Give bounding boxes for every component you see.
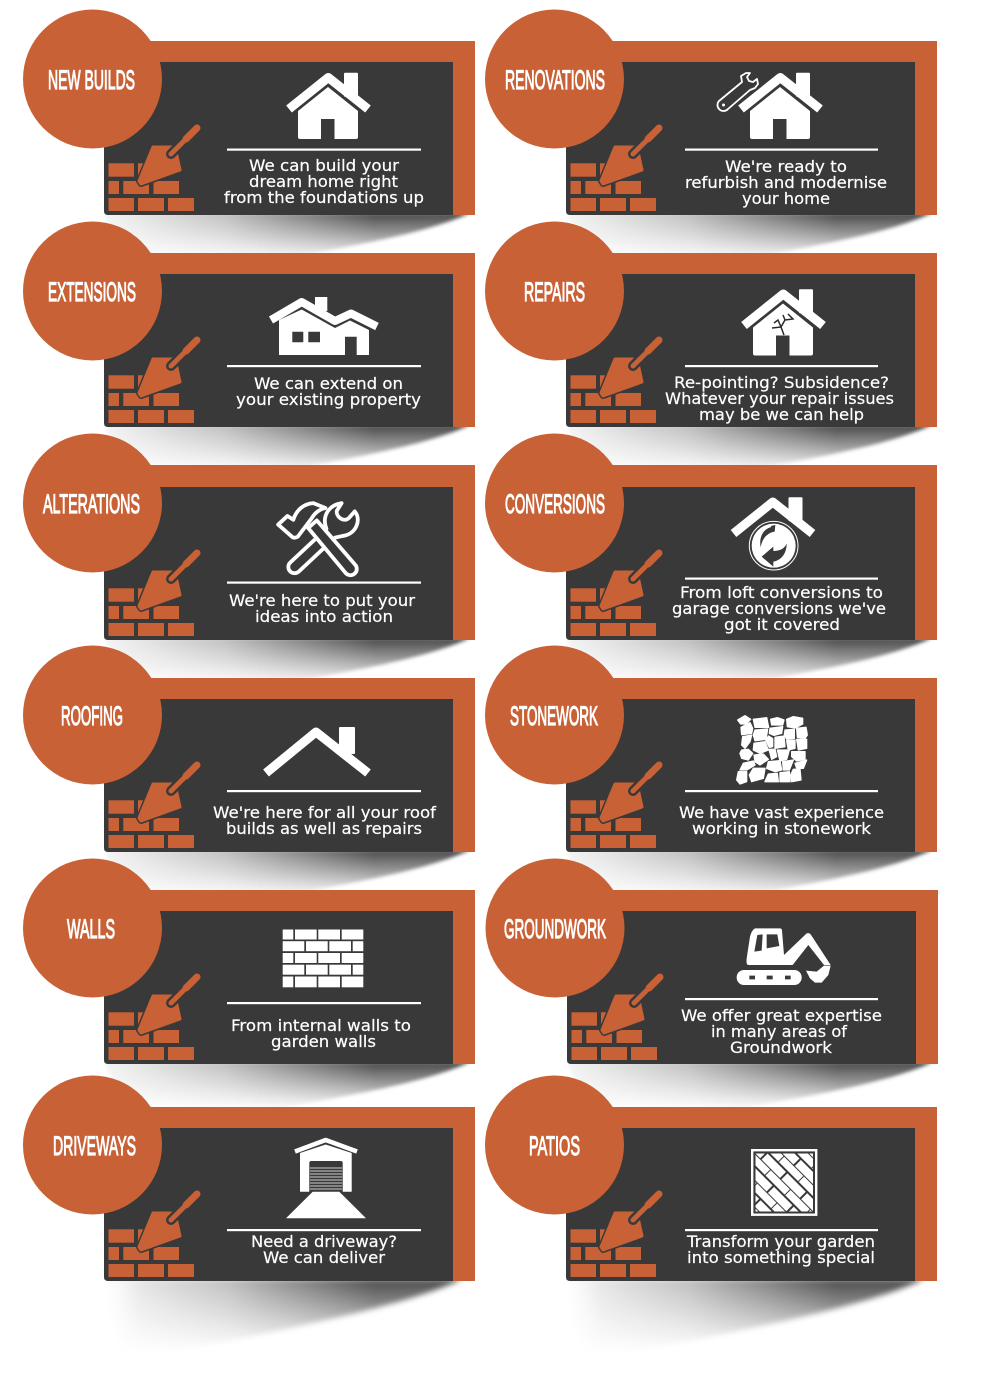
panel: roofing: ROOFING: [61, 701, 123, 731]
heading: walls: WALLS: [67, 914, 115, 944]
icon: trowel and bricks: [570, 553, 659, 636]
text: walls description: From internal walls to: [231, 1016, 411, 1035]
text: driveways description: [251, 1232, 397, 1267]
icon: garage with driveway: [286, 1140, 366, 1218]
icon: house: [289, 73, 368, 139]
panel: new builds: [23, 10, 475, 264]
icon: hammer and wrench: [278, 503, 358, 575]
text: repairs description: may be we can help: [699, 405, 864, 424]
panel: stonework: [485, 646, 937, 901]
panel: walls: [23, 858, 475, 1113]
heading: repairs: REPAIRS: [524, 277, 585, 307]
text: roofing description: builds as well as repairs: [226, 819, 422, 838]
text: roofing description: We're here for all your roof: [213, 803, 436, 822]
text: groundwork description: in many areas of: [711, 1022, 847, 1041]
text: renovations description: refurbish and modernise: [685, 173, 887, 192]
text: extensions description: We can extend on: [254, 374, 403, 393]
text: driveways description: Need a driveway?: [251, 1232, 397, 1251]
panel: repairs: [485, 222, 937, 476]
panel: extensions: [23, 222, 475, 476]
icon: trowel and bricks: [108, 553, 197, 636]
icon: excavator: [737, 928, 831, 985]
icon: trowel and bricks: [108, 340, 197, 423]
text: stonework description: [679, 803, 884, 838]
icon: cracked house: [744, 289, 823, 356]
text: alterations description: [229, 591, 415, 626]
text: extensions description: [236, 374, 421, 409]
icon: trowel and bricks: [570, 1194, 659, 1277]
heading: alterations: ALTERATIONS: [43, 489, 140, 519]
text: roofing description: [213, 803, 436, 838]
text: alterations description: We're here to put your: [229, 591, 415, 610]
text: repairs description: [665, 373, 894, 424]
text: renovations description: your home: [742, 189, 830, 208]
text: conversions description: [672, 583, 886, 634]
icon: stone pattern: [737, 716, 807, 784]
text: repairs description: Re-pointing? Subsidence?: [674, 373, 889, 392]
text: conversions description: got it covered: [724, 615, 840, 634]
text: walls description: [231, 1016, 411, 1051]
icon: roof: [266, 727, 368, 773]
text: groundwork description: Groundwork: [730, 1038, 833, 1057]
panel: driveways: [23, 1076, 475, 1357]
text: renovations description: We're ready to: [725, 157, 847, 176]
heading: renovations: RENOVATIONS: [505, 65, 605, 95]
icon: trowel and bricks: [108, 765, 197, 848]
heading: conversions: CONVERSIONS: [505, 489, 605, 519]
text: repairs description: Whatever your repair issues: [665, 389, 894, 408]
text: driveways description: We can deliver: [263, 1248, 385, 1267]
text: alterations description: ideas into action: [255, 607, 393, 626]
text: walls description: garden walls: [271, 1032, 376, 1051]
panel: conversions: [485, 434, 937, 689]
panel: groundwork: [486, 858, 938, 1113]
text: new builds description: [224, 156, 424, 207]
panel: stonework: STONEWORK: [510, 701, 598, 731]
icon: trowel and bricks: [570, 765, 659, 848]
icon: extended house: [271, 297, 377, 355]
heading: patios: PATIOS: [529, 1131, 580, 1161]
heading: driveways: DRIVEWAYS: [53, 1131, 136, 1161]
text: patios description: [686, 1232, 875, 1267]
text: groundwork description: We offer great expertise: [681, 1006, 882, 1025]
icon: house: [741, 73, 820, 139]
icon: wrench: [717, 73, 758, 111]
text: groundwork description: [681, 1006, 882, 1057]
text: extensions description: your existing property: [236, 390, 421, 409]
panel: roofing: [23, 646, 475, 901]
heading: groundwork: GROUNDWORK: [504, 914, 606, 944]
icon: trowel and bricks: [570, 128, 659, 211]
text: stonework description: We have vast experience: [679, 803, 884, 822]
text: conversions description: garage conversions we've: [672, 599, 886, 618]
panel: renovations: [485, 10, 937, 264]
panel: alterations: [23, 434, 475, 689]
text: new builds description: from the foundations up: [224, 188, 424, 207]
text: patios description: into something special: [687, 1248, 875, 1267]
icon: trowel and bricks: [570, 340, 659, 423]
icon: trowel and bricks: [108, 128, 197, 211]
text: patios description: Transform your garden: [686, 1232, 875, 1251]
text: stonework description: working in stonework: [692, 819, 872, 838]
panel: patios: [485, 1076, 937, 1357]
icon: roof with recycling arrows: [734, 497, 812, 570]
text: conversions description: From loft conversions to: [680, 583, 883, 602]
icon: paving tiles: [752, 1150, 816, 1215]
icon: trowel and bricks: [108, 977, 197, 1060]
heading: new builds: NEW BUILDS: [48, 65, 135, 95]
text: new builds description: We can build your: [249, 156, 399, 175]
text: renovations description: [685, 157, 887, 208]
icon: brick wall: [283, 930, 363, 987]
text: new builds description: dream home right: [249, 172, 398, 191]
heading: extensions: EXTENSIONS: [48, 277, 136, 307]
icon: trowel and bricks: [572, 977, 660, 1060]
icon: trowel and bricks: [108, 1194, 197, 1277]
